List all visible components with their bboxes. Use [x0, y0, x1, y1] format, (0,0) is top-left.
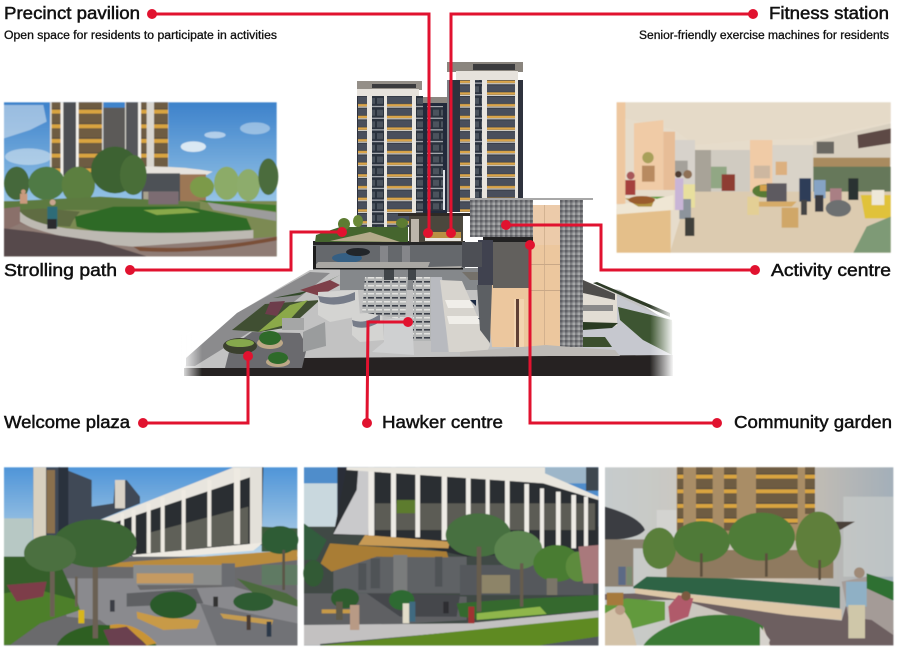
label: strolling path: Strolling path: [4, 260, 117, 280]
label: precinct pavilion: Precinct pavilion: [4, 3, 140, 23]
label: activity centre: Activity centre: [771, 260, 891, 280]
ground platform: [180, 268, 673, 377]
label: fitness station: Fitness station: [769, 3, 889, 23]
connector: hawker centre: [362, 317, 413, 428]
photo: welcome plaza view: [3, 466, 300, 646]
right residential tower: [447, 62, 523, 212]
central core tower: [423, 97, 447, 215]
landscaped terraces and planters: [223, 275, 340, 368]
connector: community garden: [525, 240, 722, 428]
label: hawker centre: Hawker centre: [382, 412, 503, 432]
precinct pavilion: [398, 213, 470, 242]
connector: precinct pavilion: [147, 9, 433, 238]
hawker centre tables: [362, 268, 448, 355]
cutaway model of the precinct: [180, 62, 674, 378]
connector: welcome plaza: [138, 351, 253, 428]
label: community garden: Community garden: [734, 412, 892, 432]
left residential tower: [357, 81, 423, 227]
photo: community garden view: [604, 466, 894, 646]
connector: strolling path: [125, 227, 347, 275]
stepped seating: [440, 280, 490, 352]
label: welcome plaza: Welcome plaza: [4, 412, 130, 432]
car park level: [313, 241, 490, 280]
roof garden: [315, 215, 408, 242]
connector: fitness station: [446, 9, 758, 238]
curved walls at hawker entrance: [282, 290, 384, 352]
description: precinct pavilion: Open space for residents to participate in activities: [4, 30, 277, 42]
photo: activity centre interior: [616, 102, 892, 254]
low curved building and right landscape: [460, 280, 674, 378]
description: fitness station: Senior-friendly exercise machines for residents: [639, 30, 889, 42]
connector: activity centre: [501, 220, 760, 275]
community block: [462, 198, 593, 347]
photo: hawker centre view: [302, 466, 600, 646]
photo: strolling path garden: [3, 102, 280, 258]
